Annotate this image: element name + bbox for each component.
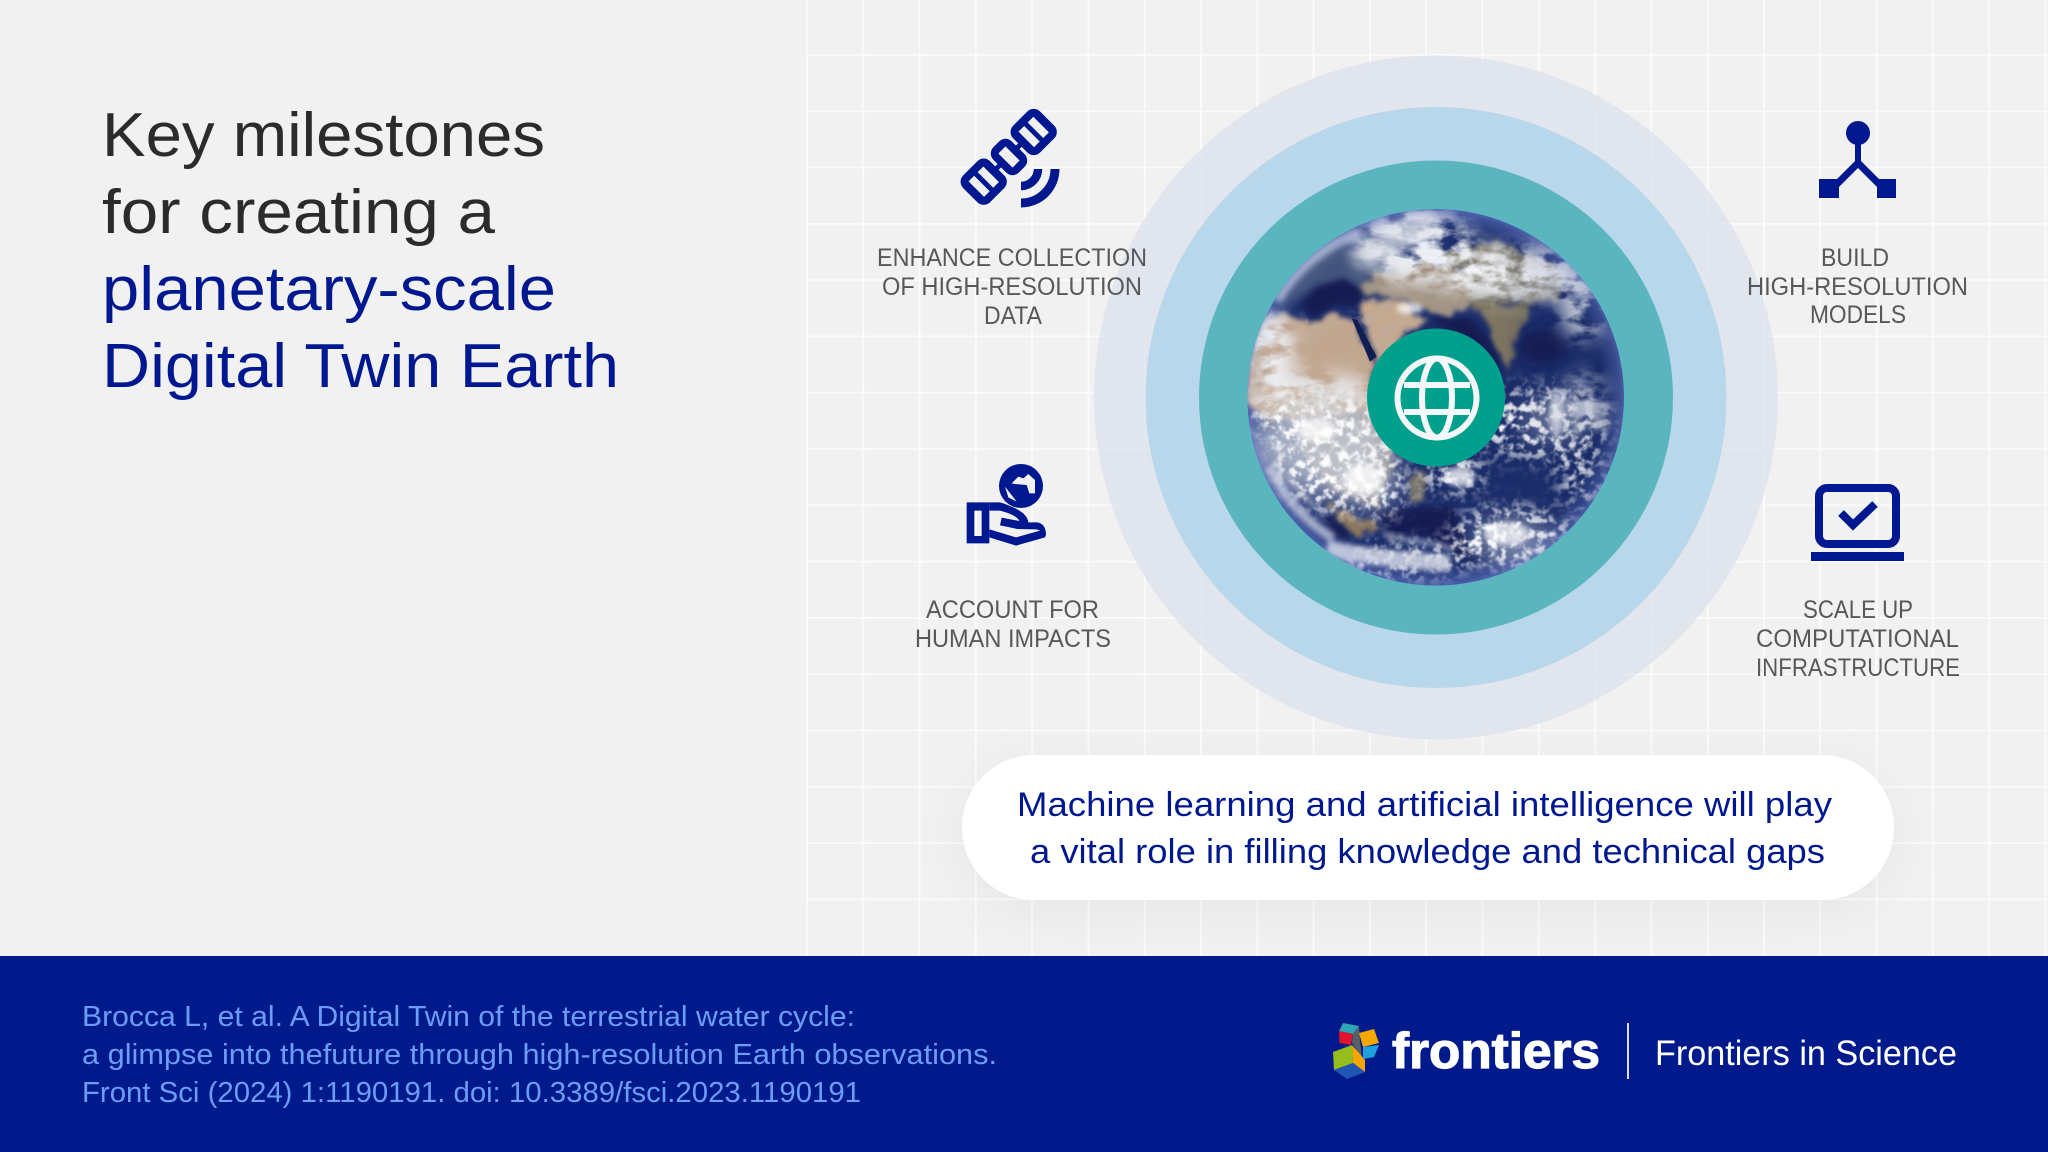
label: BUILD	[1821, 244, 1889, 272]
callout: machine learning and AI: a vital role in filling knowledge and technical gaps	[1030, 833, 1825, 871]
limb haze and night-side shading	[1508, 244, 1624, 562]
label: ACCOUNT FOR	[926, 596, 1099, 624]
storm swirl bands lower-left and south	[1270, 467, 1453, 563]
citation	[82, 1001, 997, 1109]
label: MODELS	[1810, 301, 1906, 329]
icon: laptop with checkmark	[1811, 488, 1904, 561]
citation: Front Sci (2024) 1:1190191. doi: 10.3389/fsci.2023.1190191	[82, 1077, 861, 1109]
icon: model nodes	[1819, 121, 1896, 198]
icon: hand holding globe	[967, 464, 1046, 546]
journal name: Frontiers in Science	[1655, 1034, 1957, 1073]
label: INFRASTRUCTURE	[1756, 654, 1960, 682]
cloud bank over southern africa	[1253, 393, 1583, 560]
label: OF HIGH-RESOLUTION	[882, 273, 1142, 301]
bright cloud patches	[1297, 303, 1564, 545]
upper-left rim streaks	[1277, 233, 1360, 300]
label	[1756, 596, 1960, 682]
title: for creating a	[102, 178, 496, 247]
grid backdrop	[806, 0, 2048, 956]
label	[1747, 244, 1968, 329]
upper-left hazy atlantic	[1277, 244, 1389, 308]
milestone: build high-resolution models	[1747, 121, 1968, 329]
concentric rings	[1094, 56, 1778, 740]
dark seas	[1300, 278, 1568, 567]
callout: machine learning and AI	[962, 755, 1894, 900]
footer banner	[0, 956, 2048, 1152]
label	[877, 244, 1147, 330]
icon: central globe badge	[1367, 328, 1505, 466]
label: HUMAN IMPACTS	[915, 625, 1111, 653]
divider	[1627, 1023, 1629, 1079]
title: Key milestones	[102, 101, 545, 170]
label: DATA	[984, 302, 1042, 330]
label: HIGH-RESOLUTION	[1747, 273, 1968, 301]
icon: frontiers logo cubes	[1333, 1023, 1379, 1079]
label: COMPUTATIONAL	[1756, 625, 1959, 653]
earth globe	[1247, 209, 1624, 586]
title	[102, 101, 619, 401]
label: ENHANCE COLLECTION	[877, 244, 1147, 272]
high cloud haze	[1248, 209, 1620, 439]
citation: Brocca L, et al. A Digital Twin of the terrestrial water cycle:	[82, 1001, 855, 1033]
title: planetary-scale	[102, 255, 556, 324]
icon: satellite	[957, 105, 1061, 209]
callout: machine learning and AI: Machine learning and artificial intelligence will play	[1017, 786, 1832, 824]
title: Digital Twin Earth	[102, 332, 619, 401]
detailed clouds	[1248, 239, 1622, 586]
label	[915, 596, 1111, 653]
land masses	[1243, 240, 1567, 537]
milestone: account for human impacts	[915, 464, 1111, 653]
milestone: enhance collection of high-resolution data	[877, 105, 1147, 330]
milestone: scale up computational infrastructure	[1756, 488, 1960, 682]
citation: a glimpse into thefuture through high-resolution Earth observations.	[82, 1039, 997, 1071]
frontiers wordmark: frontiers	[1392, 1023, 1600, 1079]
desert speckle	[1264, 297, 1423, 360]
label: SCALE UP	[1803, 596, 1913, 624]
